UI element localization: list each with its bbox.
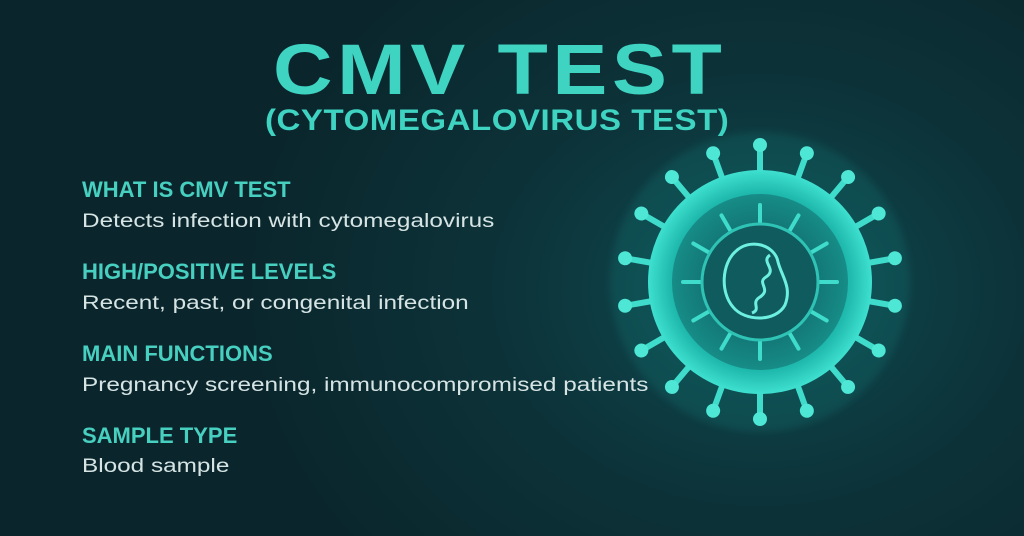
text: what is: Detects infection with cytomegalovirus: [82, 211, 494, 232]
subtitle: (CYTOMEGALOVIRUS TEST): [265, 104, 729, 137]
text: sample type: Blood sample: [82, 456, 229, 477]
text: high levels: Recent, past, or congenital infection: [82, 293, 469, 314]
title: CMV TEST: [273, 31, 727, 110]
heading: sample type: SAMPLE TYPE: [82, 423, 237, 448]
heading: what is: WHAT IS CMV TEST: [82, 177, 291, 202]
heading: high levels: HIGH/POSITIVE LEVELS: [82, 259, 336, 284]
heading: main functions: MAIN FUNCTIONS: [82, 341, 273, 366]
text: main functions: Pregnancy screening, immunocompromised patients: [82, 375, 648, 396]
icon: virus: [610, 132, 910, 432]
